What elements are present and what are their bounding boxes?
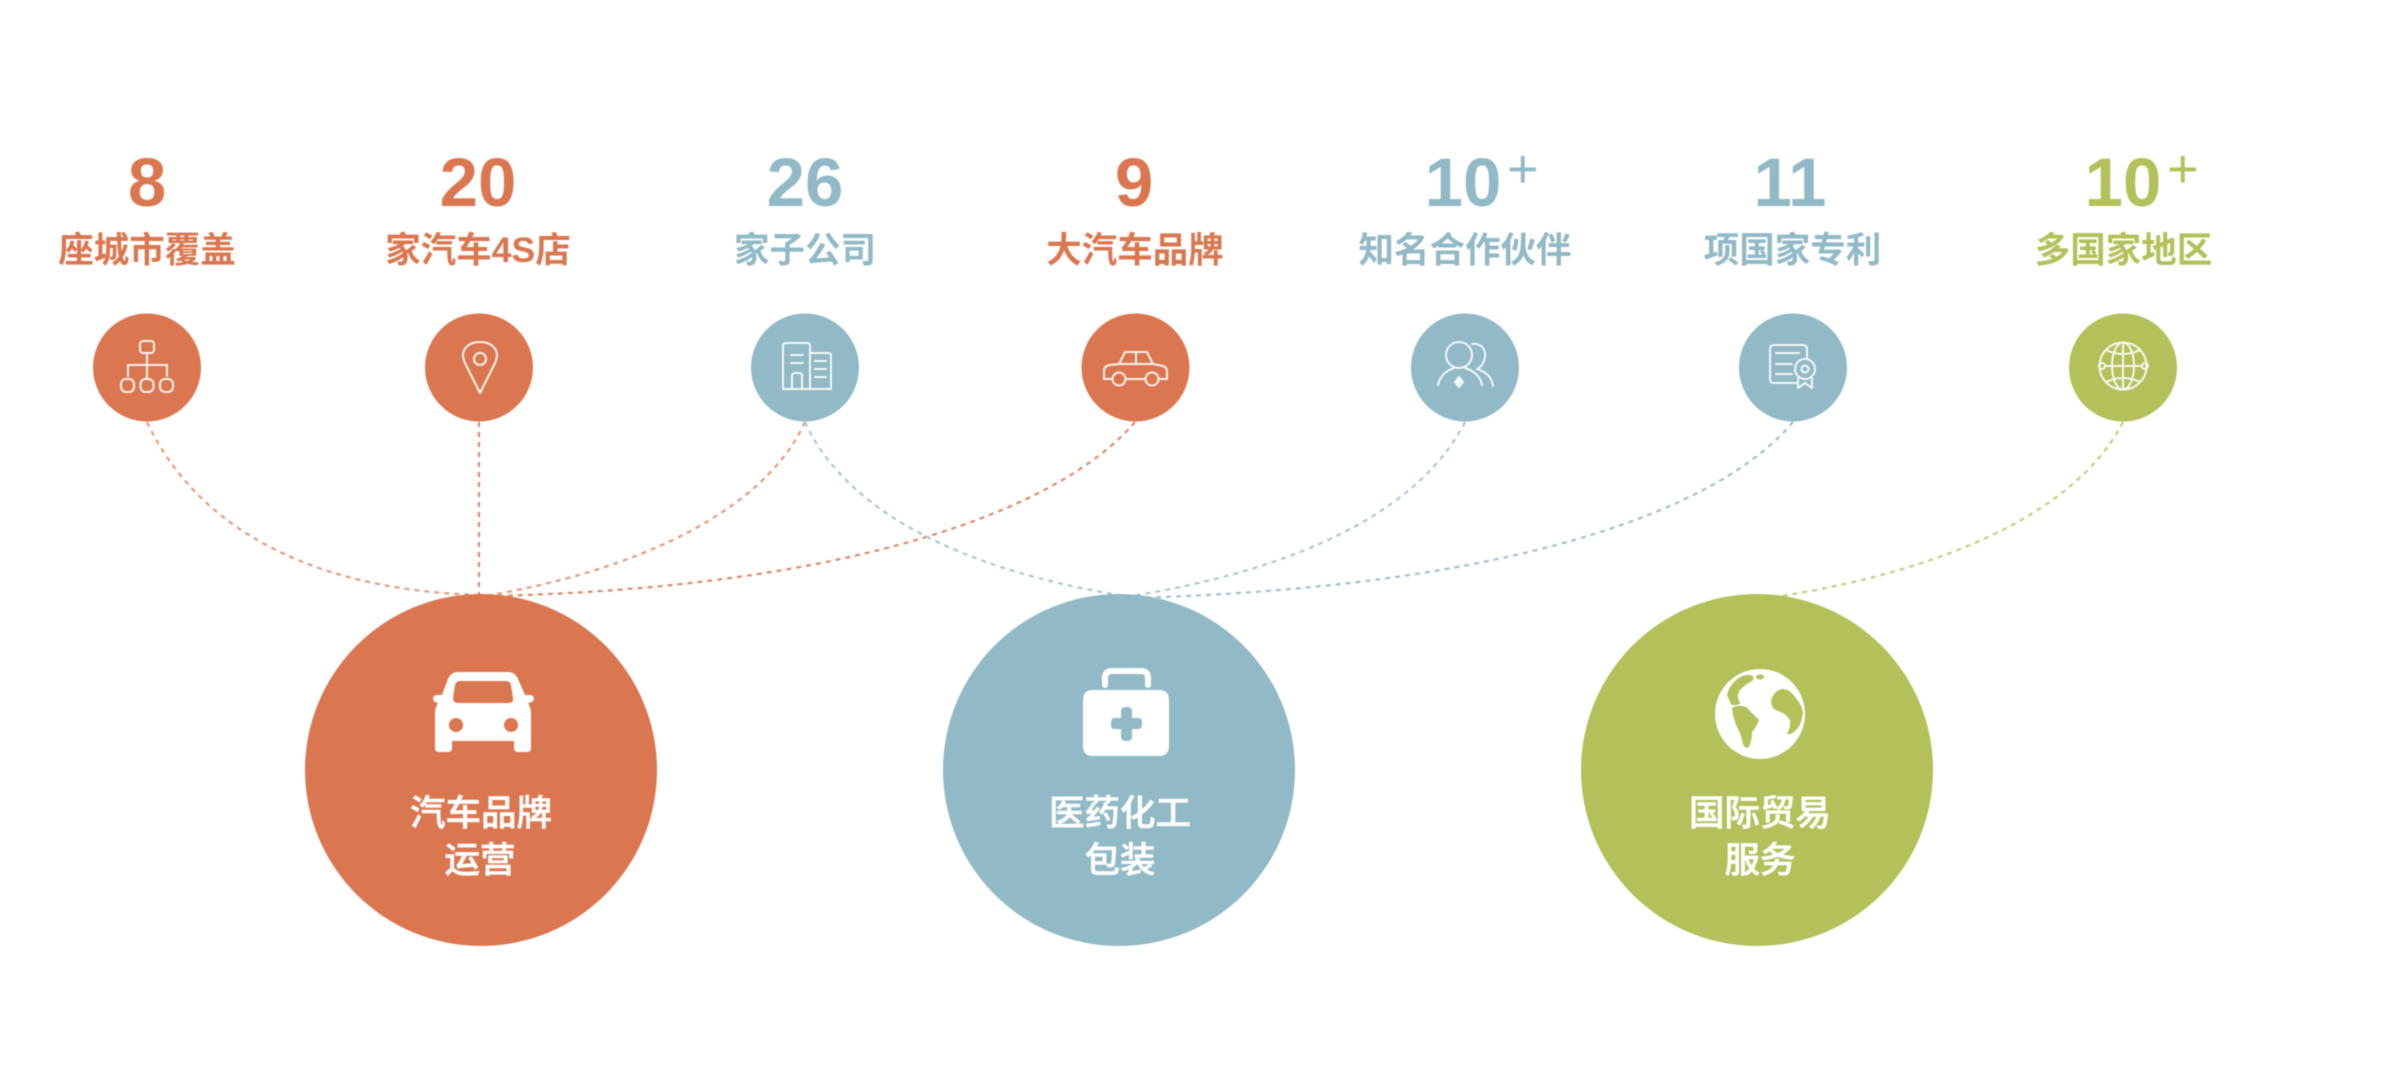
stat: 10+ countries	[2035, 139, 2212, 422]
label: 多国家地区	[2035, 230, 2212, 270]
icon: car front	[433, 672, 534, 752]
panel: international trade services	[1581, 594, 1933, 946]
icon: certificate	[1739, 314, 1847, 422]
icon: location pin	[425, 314, 533, 422]
icon: medical bag	[1083, 671, 1169, 756]
icon: buildings	[751, 314, 859, 422]
number: 9	[1115, 144, 1153, 221]
label line two: 运营	[444, 840, 516, 880]
label: 汽车品牌	[410, 793, 552, 833]
circle background	[1581, 594, 1933, 946]
label: 座城市覆盖	[58, 230, 236, 270]
label: 家子公司	[734, 230, 876, 270]
label: 大汽车品牌	[1046, 230, 1224, 270]
connector: patents to pharma	[1130, 422, 1793, 598]
circle background	[305, 594, 657, 946]
label: 项国家专利	[1704, 230, 1881, 270]
dashed connectors	[147, 422, 2123, 598]
label line two: 服务	[1724, 840, 1796, 880]
number: 10	[2085, 144, 2161, 221]
panel: pharma and chemical packaging	[943, 594, 1295, 946]
stat: 10+ partners	[1358, 139, 1572, 422]
number: 10	[1425, 144, 1501, 221]
plus sign: +	[1507, 139, 1539, 199]
connector: 4S stores to automotive	[478, 422, 480, 596]
stat: 20 4S stores	[385, 144, 571, 422]
panel: automotive brand operations	[305, 594, 657, 946]
connector: subsidiaries to automotive	[485, 422, 805, 596]
connector: subsidiaries to pharma	[805, 422, 1125, 596]
circle background	[943, 594, 1295, 946]
label: 医药化工	[1049, 793, 1191, 833]
number: 26	[767, 144, 843, 221]
stat: 26 subsidiaries	[734, 144, 876, 422]
connector: partners to pharma	[1125, 422, 1465, 597]
label: 国际贸易	[1689, 793, 1831, 833]
number: 20	[440, 144, 516, 221]
icon: people	[1411, 314, 1519, 422]
stat: 9 car brands	[1046, 144, 1224, 422]
number: 8	[128, 144, 166, 221]
number: 11	[1754, 144, 1826, 221]
stat: 8 cities	[58, 144, 236, 422]
icon: org network	[93, 314, 201, 422]
connector: countries to trade	[1775, 422, 2123, 597]
label line two: 包装	[1084, 840, 1156, 880]
stat: 11 patents	[1704, 144, 1881, 422]
icon: earth	[1715, 669, 1805, 759]
connector: car brands to automotive	[490, 422, 1135, 596]
icon: sedan outline	[1082, 314, 1190, 422]
plus sign: +	[2167, 139, 2199, 199]
label: 家汽车4S店	[385, 230, 571, 270]
label: 知名合作伙伴	[1358, 230, 1572, 270]
icon: wire globe	[2069, 314, 2177, 422]
connector: city coverage to automotive	[147, 422, 480, 595]
